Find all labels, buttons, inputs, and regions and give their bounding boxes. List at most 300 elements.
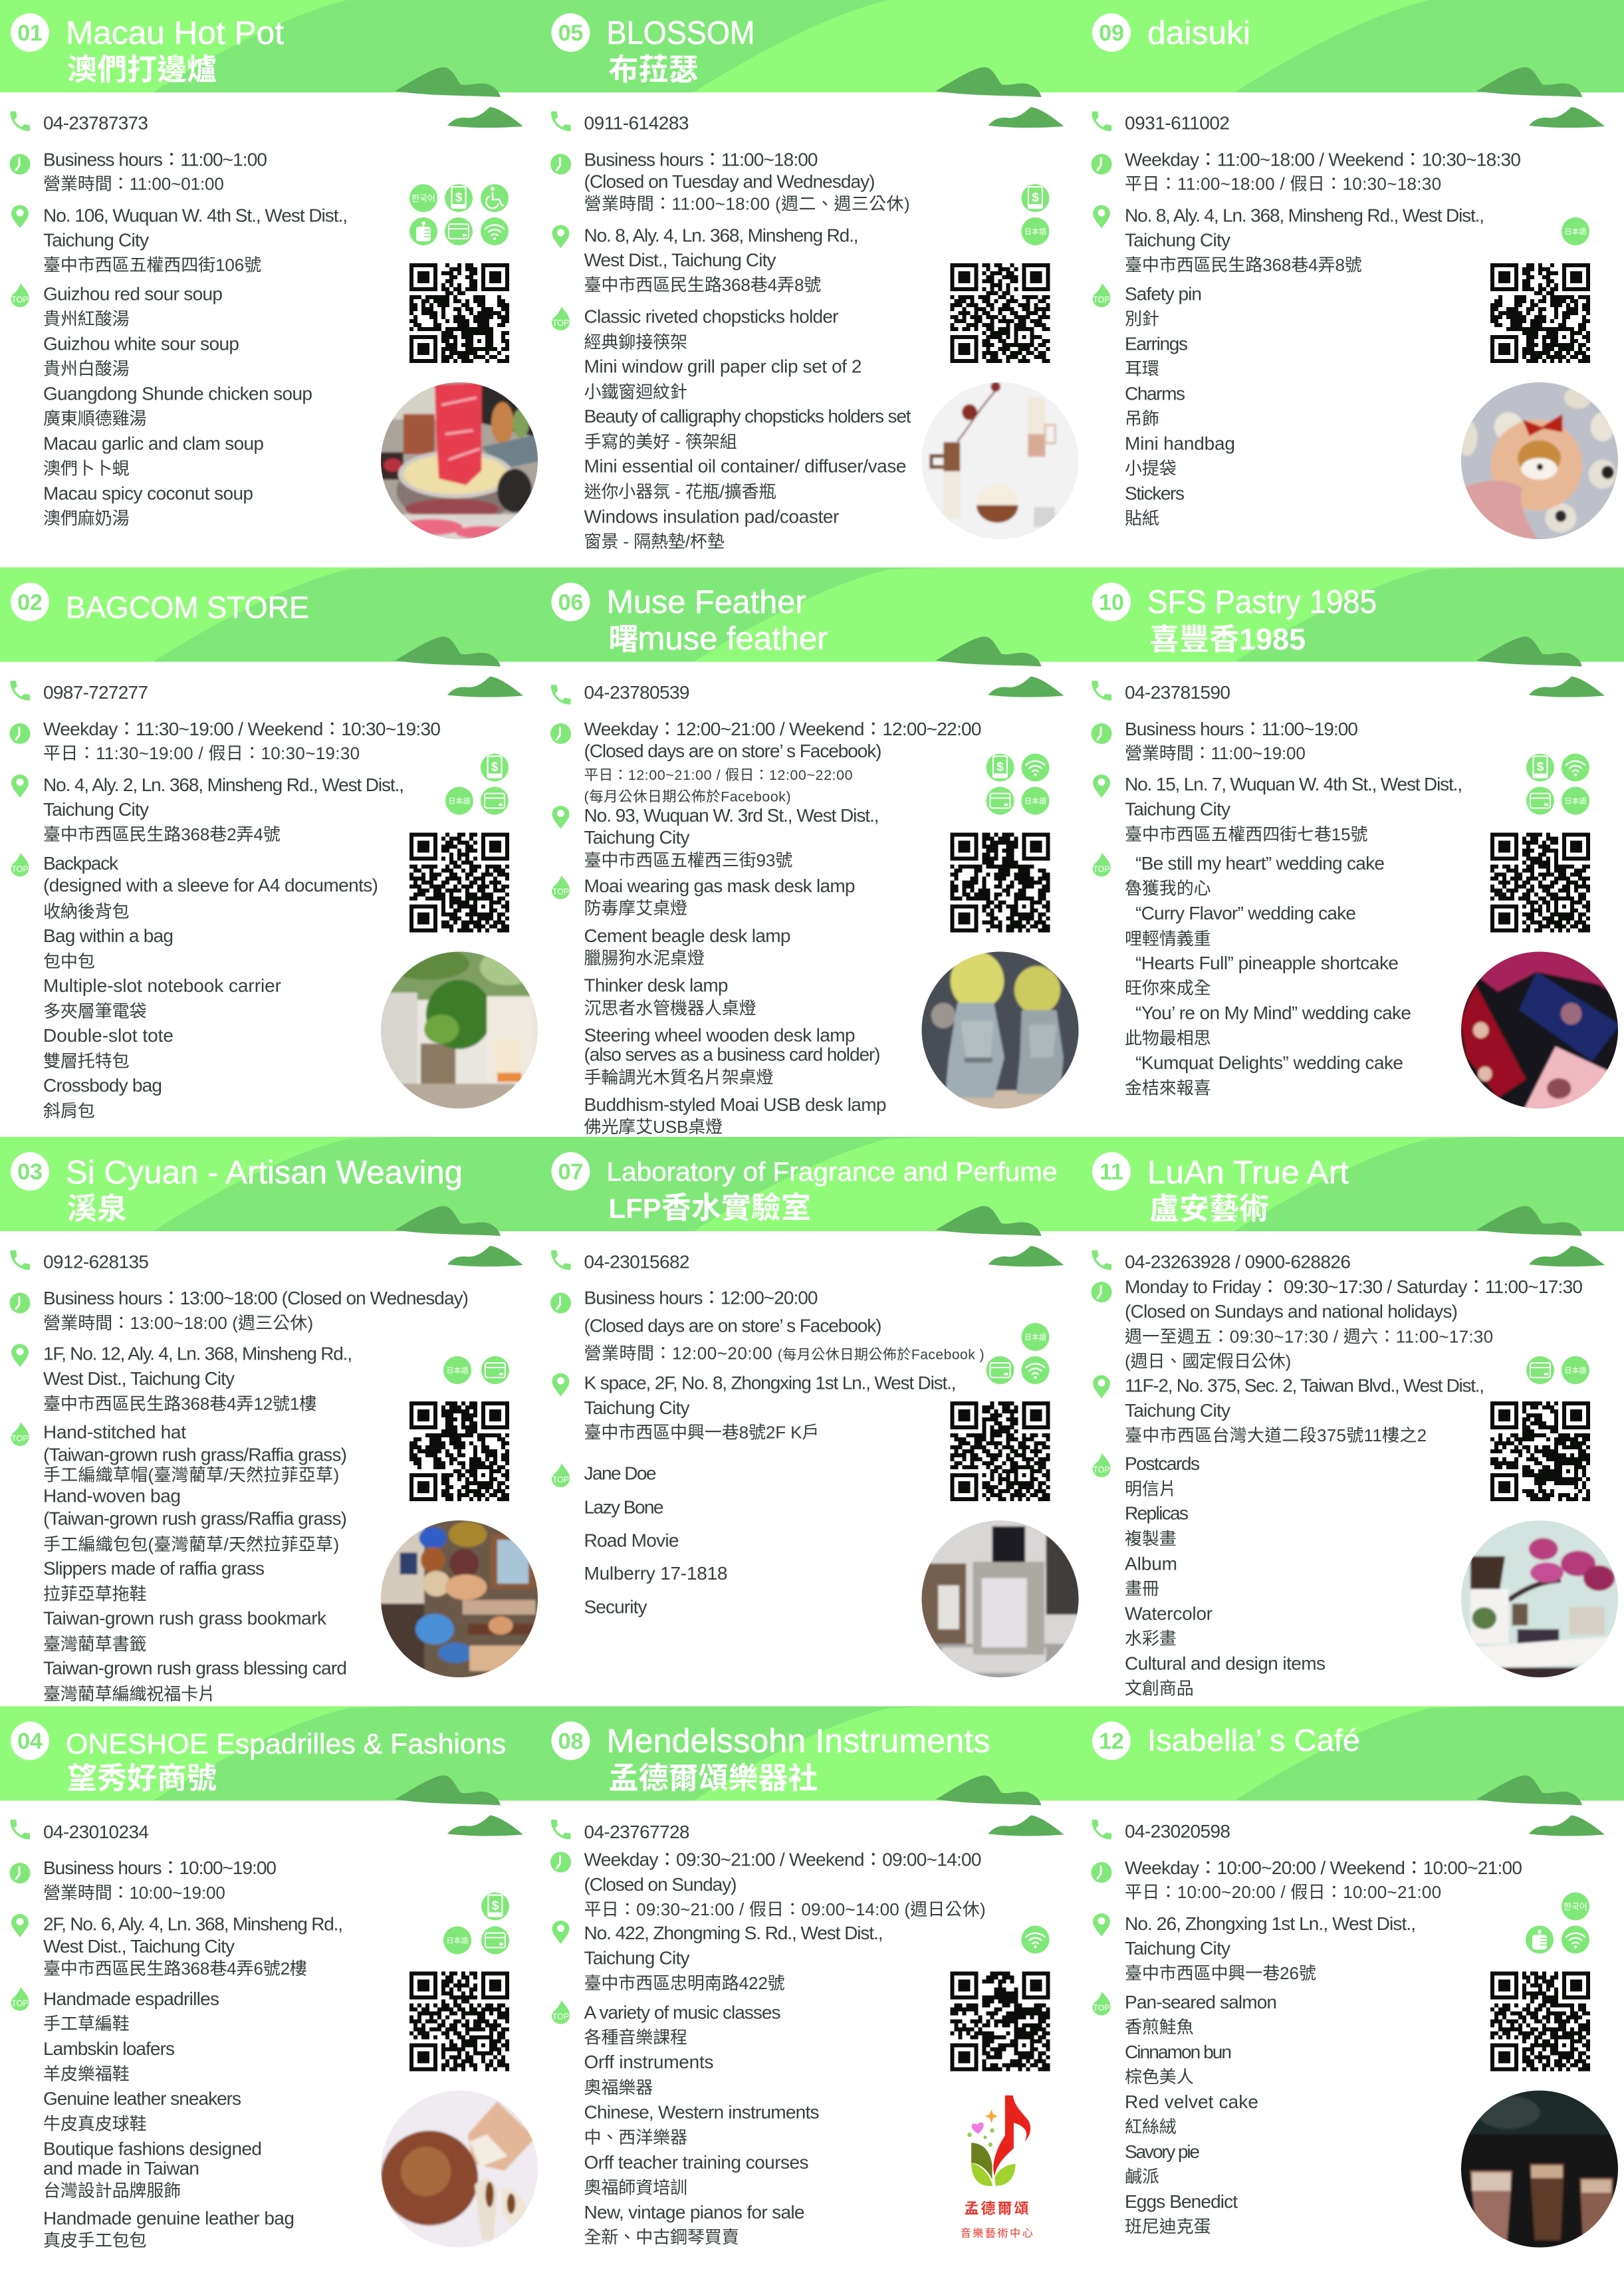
top items list: 畫冊 xyxy=(1125,1578,1159,1598)
header band xyxy=(1082,1706,1624,1800)
panel 10: SFS Pastry 1985 xyxy=(1082,568,1624,1116)
address: 臺中市西區台灣大道二段375號11樓之2 xyxy=(1125,1425,1427,1445)
phone icon xyxy=(1092,1820,1111,1840)
top items list: 防毒摩艾桌燈 xyxy=(584,898,687,918)
TOP drop icon xyxy=(552,1463,570,1487)
address: Taichung City xyxy=(584,1948,690,1968)
location pin icon xyxy=(11,1344,29,1367)
top items list: Road Movie xyxy=(584,1530,679,1550)
QR code xyxy=(951,263,1050,363)
business hours: Weekday：11:00~18:00 / Weekend：10:30~18:30 xyxy=(1125,149,1521,170)
top items list: 旺你來成全 xyxy=(1125,978,1211,998)
phone number: 04-23781590 xyxy=(1125,682,1230,703)
top items list: Handmade genuine leather bag xyxy=(43,2208,294,2228)
top items list: (designed with a sleeve for A4 documents) xyxy=(43,875,378,896)
number badge 07 xyxy=(552,1152,590,1191)
address: 臺中市西區五權西四街106號 xyxy=(43,255,261,275)
panel 11: LuAn True Art xyxy=(1082,1137,1624,1698)
top items list: 奧福師資培訓 xyxy=(584,2178,687,2198)
top items list: Crossbody bag xyxy=(43,1075,162,1096)
top items list: (also serves as a business card holder) xyxy=(584,1044,880,1065)
top items list: Jane Doe xyxy=(584,1463,657,1484)
top items list: Genuine leather sneakers xyxy=(43,2088,241,2109)
title: 喜豐香1985 xyxy=(1149,622,1306,656)
business hours xyxy=(43,149,267,194)
clock icon xyxy=(550,154,571,174)
QR code xyxy=(951,832,1050,932)
panel 01: Macau Hot Pot xyxy=(0,0,552,547)
address: No. 15, Ln. 7, Wuquan W. 4th St., West Dist., xyxy=(1125,774,1462,794)
top items list: Album xyxy=(1125,1553,1177,1574)
top items list: 明信片 xyxy=(1125,1479,1177,1498)
top items list: 真皮手工包包 xyxy=(43,2230,146,2250)
top items list: 手寫的美好 - 筷架組 xyxy=(584,432,737,452)
top items list: Pan-seared salmon xyxy=(1125,1992,1277,2012)
top items list: Beauty of calligraphy chopsticks holders set xyxy=(584,406,911,427)
service icons xyxy=(1526,754,1589,815)
TOP drop icon xyxy=(11,283,29,307)
service icons: 日本語 xyxy=(1565,227,1586,236)
clock icon xyxy=(9,723,31,744)
title: BLOSSOM xyxy=(606,15,755,51)
top items list: 紅絲絨 xyxy=(1125,2117,1177,2137)
header band xyxy=(541,568,1093,662)
top items list: 奧福樂器 xyxy=(584,2078,653,2097)
address: Taichung City xyxy=(1125,230,1230,250)
top items list: Classic riveted chopsticks holder xyxy=(584,306,839,327)
top items list: 澳們麻奶湯 xyxy=(43,508,130,528)
title xyxy=(66,15,284,86)
business hours xyxy=(1125,1857,1522,1902)
location pin icon xyxy=(11,775,29,798)
photo: gift boxes xyxy=(1461,952,1618,1109)
number badge 03 xyxy=(11,1152,49,1191)
top items list: 斜肩包 xyxy=(43,1101,95,1121)
business hours: Weekday：12:00~21:00 / Weekend：12:00~22:00 xyxy=(584,719,981,739)
header band xyxy=(1082,0,1624,92)
top items list: 魯獲我的心 xyxy=(1125,878,1211,898)
top items list: 佛光摩艾USB桌燈 xyxy=(584,1117,723,1137)
address xyxy=(1125,1375,1484,1445)
top items list: Mini essential oil container/ diffuser/vase xyxy=(584,456,907,476)
address: Taichung City xyxy=(1125,1400,1230,1421)
QR code xyxy=(951,1972,1050,2072)
clock icon xyxy=(550,723,571,744)
address xyxy=(1125,1913,1416,1983)
number badge 08 xyxy=(552,1722,590,1760)
top items list: Taiwan-grown rush grass bookmark xyxy=(43,1608,327,1629)
service icons xyxy=(1562,217,1589,245)
clock icon xyxy=(9,1292,31,1314)
clock icon xyxy=(9,1863,31,1883)
service icons: 日本語 xyxy=(1565,796,1586,806)
top items list: Bag within a bag xyxy=(43,925,174,946)
number badge 11 xyxy=(1092,1152,1131,1191)
top items list: Hand-woven bag xyxy=(43,1485,181,1506)
location pin icon xyxy=(552,225,569,249)
business hours: 平日：11:00~18:00 / 假日：10:30~18:30 xyxy=(1125,174,1441,194)
number badge 10 xyxy=(1092,582,1131,621)
QR code xyxy=(409,1972,509,2072)
top items list: Cinnamon bun xyxy=(1125,2042,1232,2062)
title: 澳們打邊爐 xyxy=(67,53,217,86)
location pin icon xyxy=(552,1374,569,1396)
QR code xyxy=(409,1401,509,1501)
TOP drop icon: TOP xyxy=(11,295,29,304)
business hours xyxy=(43,1857,277,1903)
top items list: Chinese, Western instruments xyxy=(584,2102,819,2122)
title xyxy=(606,15,755,86)
title: LuAn True Art xyxy=(1147,1155,1349,1191)
title xyxy=(66,1729,506,1795)
address: Taichung City xyxy=(1125,799,1230,819)
header band xyxy=(541,1137,1093,1231)
top items list: Macau spicy coconut soup xyxy=(43,483,253,504)
business hours: Business hours：12:00~20:00 xyxy=(584,1287,818,1308)
phone number: 04-23020598 xyxy=(1125,1821,1230,1842)
title: ONESHOE Espadrilles & Fashions xyxy=(66,1729,506,1760)
header band xyxy=(0,1137,552,1231)
business hours xyxy=(43,719,441,763)
top items list: (Taiwan-grown rush grass/Raffia grass) xyxy=(43,1508,347,1529)
top items list xyxy=(43,283,312,528)
business hours: Business hours：11:00~19:00 xyxy=(1125,719,1358,739)
address: 臺中市西區民生路368巷4弄12號1樓 xyxy=(43,1393,316,1413)
address xyxy=(1125,205,1484,275)
number badge 12 xyxy=(1092,1722,1131,1760)
business hours: Business hours：11:00~1:00 xyxy=(43,149,267,170)
address xyxy=(584,1923,883,1993)
top items list: Thinker desk lamp xyxy=(584,975,729,996)
top items list: 吊飾 xyxy=(1125,408,1159,428)
title: 溪泉 xyxy=(67,1191,127,1226)
address: 臺中市西區民生路368巷2弄4號 xyxy=(43,824,281,844)
clock icon xyxy=(9,154,31,174)
address: No. 26, Zhongxing 1st Ln., West Dist., xyxy=(1125,1913,1416,1934)
top items list: 台灣設計品牌服飾 xyxy=(43,2181,181,2201)
location pin icon xyxy=(11,1914,29,1937)
service icons: 日本語 xyxy=(448,796,471,806)
top items list: 水彩畫 xyxy=(1125,1629,1177,1649)
top items list: 多夾層筆電袋 xyxy=(43,1001,147,1021)
service icons: 日本語 xyxy=(447,1366,468,1375)
title: LFP香水實驗室 xyxy=(609,1191,811,1225)
logo: Mendelssohn music note: 音樂藝術中心 xyxy=(961,2227,1034,2239)
top items list: 沉思者水管機器人桌燈 xyxy=(584,999,756,1018)
phone icon xyxy=(551,1250,571,1270)
TOP drop icon: TOP xyxy=(552,2012,569,2021)
address: No. 422, Zhongming S. Rd., West Dist., xyxy=(584,1923,883,1943)
address xyxy=(1125,774,1462,844)
top items list xyxy=(43,853,378,1121)
top items list: Red velvet cake xyxy=(1125,2092,1258,2112)
small mountain xyxy=(447,677,523,697)
title xyxy=(606,1722,990,1795)
small mountain xyxy=(988,1815,1064,1836)
header band xyxy=(0,0,552,92)
service icons xyxy=(443,1892,509,1955)
business hours: (每月公休日期公佈於Facebook) xyxy=(584,789,791,805)
address: Taichung City xyxy=(43,230,149,250)
panel 07: Laboratory of Fragrance and Perfume xyxy=(541,1137,1093,1687)
location pin icon xyxy=(1093,205,1110,229)
photo: ceramics xyxy=(921,382,1078,539)
small mountain xyxy=(447,107,523,128)
clock icon xyxy=(1092,154,1111,174)
header band xyxy=(541,0,1093,92)
top items list: 拉菲亞草拖鞋 xyxy=(43,1584,146,1604)
TOP drop icon xyxy=(11,852,29,876)
title: daisuki xyxy=(1147,15,1250,51)
top items list: Security xyxy=(584,1597,647,1617)
business hours: Business hours：10:00~19:00 xyxy=(43,1857,277,1878)
panel 02: BAGCOM STORE xyxy=(0,568,552,1121)
address: West Dist., Taichung City xyxy=(43,1936,235,1957)
top items list: Lazy Bone xyxy=(584,1497,663,1517)
QR code xyxy=(409,263,509,363)
phone number: 04-23263928 / 0900-628826 xyxy=(1125,1251,1351,1272)
number badge 01: 01 xyxy=(17,21,43,46)
location pin icon xyxy=(1093,1375,1110,1399)
address: Taichung City xyxy=(584,1397,690,1418)
top items list: Charms xyxy=(1125,383,1185,404)
QR code xyxy=(951,1401,1050,1501)
address: K space, 2F, No. 8, Zhongxing 1st Ln., West Dist., xyxy=(584,1372,956,1393)
photo: cafe drinks xyxy=(1453,2084,1624,2258)
business hours: 營業時間：12:00~20:00 (每月公休日期公佈於Facebook ) xyxy=(584,1343,984,1363)
business hours xyxy=(584,1287,984,1363)
top items list: Eggs Benedict xyxy=(1125,2191,1238,2212)
top items list: 收納後背包 xyxy=(43,901,130,921)
phone icon xyxy=(551,1820,571,1840)
header mountain xyxy=(1476,637,1582,666)
header band xyxy=(541,1706,1093,1800)
header mountain xyxy=(1476,67,1582,97)
top items list: “Be still my heart” wedding cake xyxy=(1135,853,1385,874)
title: 望秀好商號 xyxy=(67,1761,217,1795)
number badge 05 xyxy=(552,13,590,52)
business hours xyxy=(584,719,981,805)
photo: moai lamps xyxy=(921,952,1078,1109)
top items list xyxy=(584,1463,727,1617)
top items list: 廣東順德雞湯 xyxy=(43,408,146,428)
panel 09: daisuki xyxy=(1082,0,1624,547)
top items list: 鹹派 xyxy=(1125,2167,1159,2187)
business hours xyxy=(43,1288,469,1333)
phone icon xyxy=(551,685,571,705)
top items list: Steering wheel wooden desk lamp xyxy=(584,1025,855,1045)
business hours: (Closed days are on store’ s Facebook) xyxy=(584,741,881,761)
service icons xyxy=(1526,1892,1589,1953)
location pin icon xyxy=(552,806,569,829)
small mountain xyxy=(1529,1815,1605,1836)
title: 布菈瑟 xyxy=(609,53,699,86)
top items list: Watercolor xyxy=(1125,1604,1213,1623)
clock icon xyxy=(1092,1862,1111,1883)
title: Muse Feather xyxy=(606,584,806,620)
service icon: wifi xyxy=(1021,1925,1049,1953)
business hours: Business hours：13:00~18:00 (Closed on Wednesday) xyxy=(43,1288,469,1308)
address: No. 93, Wuquan W. 3rd St., West Dist., xyxy=(584,805,879,826)
logo: Mendelssohn music note: 孟德爾頌 xyxy=(964,2201,1031,2216)
top items list: 貼紙 xyxy=(1125,508,1159,528)
address: Taichung City xyxy=(584,827,690,848)
TOP drop icon xyxy=(1093,1992,1110,2016)
service icons xyxy=(986,754,1049,815)
number badge 05: 05 xyxy=(558,21,583,46)
logo: Mendelssohn music note xyxy=(961,2095,1034,2239)
top items list: 臺灣藺草編織祝福卡片 xyxy=(43,1684,215,1704)
small mountain xyxy=(447,1815,523,1836)
number badge 09 xyxy=(1092,13,1131,52)
top items list: 牛皮真皮球鞋 xyxy=(43,2114,146,2134)
number badge 06: 06 xyxy=(558,590,583,616)
header mountain xyxy=(395,637,501,666)
address: No. 8, Aly. 4, Ln. 368, Minsheng Rd., West Dist., xyxy=(1125,205,1484,226)
address: 臺中市西區中興一巷8號2F K戶 xyxy=(584,1423,819,1443)
business hours xyxy=(1125,1276,1583,1371)
TOP drop icon: TOP xyxy=(1093,864,1110,874)
top items list: Mini window grill paper clip set of 2 xyxy=(584,356,862,376)
top items list: Handmade espadrilles xyxy=(43,1988,219,2009)
top items list: Hand-stitched hat xyxy=(43,1421,186,1443)
service icons xyxy=(443,1356,509,1384)
address: Taichung City xyxy=(43,799,149,820)
number badge 04: 04 xyxy=(17,1729,43,1754)
number badge 12: 12 xyxy=(1099,1729,1124,1754)
title xyxy=(606,1157,1057,1225)
TOP drop icon: TOP xyxy=(552,1475,569,1485)
top items list: 班尼迪克蛋 xyxy=(1125,2216,1211,2236)
title: Laboratory of Fragrance and Perfume xyxy=(606,1157,1057,1187)
top items list: Earrings xyxy=(1125,334,1188,354)
top items list: 此物最相思 xyxy=(1125,1028,1211,1048)
service icons: 日本語 xyxy=(1565,1366,1586,1375)
phone number: 04-23015682 xyxy=(584,1251,690,1272)
business hours: 平日：10:00~20:00 / 假日：10:00~21:00 xyxy=(1125,1882,1441,1902)
top items list: 別針 xyxy=(1125,308,1159,328)
header band xyxy=(1082,1137,1624,1231)
top items list: Double-slot tote xyxy=(43,1025,174,1046)
address: West Dist., Taichung City xyxy=(584,250,776,270)
clock icon xyxy=(1092,723,1111,744)
phone icon xyxy=(551,111,571,131)
top items list: 各種音樂課程 xyxy=(584,2028,687,2048)
top items list: Mulberry 17-1818 xyxy=(584,1563,727,1584)
clock icon xyxy=(1092,1282,1111,1302)
top items list: 臘腸狗水泥桌燈 xyxy=(584,948,705,968)
top items list: New, vintage pianos for sale xyxy=(584,2202,804,2222)
photo: hat and shoes xyxy=(381,2090,538,2247)
title xyxy=(1147,584,1377,656)
top items list: Guangdong Shunde chicken soup xyxy=(43,383,312,404)
top items list: Slippers made of raffia grass xyxy=(43,1558,265,1578)
address xyxy=(43,1343,352,1413)
phone number: 0931-611002 xyxy=(1125,113,1230,133)
top items list: 小鐵窗迴紋針 xyxy=(584,382,687,402)
clock icon xyxy=(550,1852,571,1872)
photo: shiba charm xyxy=(1461,382,1618,539)
service icons xyxy=(445,754,509,815)
title xyxy=(66,1155,463,1226)
TOP drop icon xyxy=(11,1986,29,2010)
QR code xyxy=(1490,263,1590,363)
number badge 02 xyxy=(11,582,49,621)
TOP drop icon: TOP xyxy=(11,1434,29,1443)
address: West Dist., Taichung City xyxy=(43,1368,235,1389)
top items list xyxy=(1125,1453,1326,1698)
TOP drop icon: TOP xyxy=(1093,295,1110,304)
top items list: Macau garlic and clam soup xyxy=(43,433,264,453)
location pin icon xyxy=(11,205,29,229)
number badge 08: 08 xyxy=(558,1729,583,1754)
business hours: 營業時間：11:00~18:00 (週二、週三公休) xyxy=(584,194,909,214)
small mountain xyxy=(1529,1246,1605,1266)
top items list: 全新、中古鋼琴買賣 xyxy=(584,2227,739,2247)
top items list: “Curry Flavor” wedding cake xyxy=(1135,903,1356,923)
top items list xyxy=(584,306,911,552)
phone number: 0911-614283 xyxy=(584,113,689,133)
top items list: 手輪調光木質名片架桌燈 xyxy=(584,1068,774,1088)
title: Macau Hot Pot xyxy=(66,15,284,51)
address: No. 8, Aly. 4, Ln. 368, Minsheng Rd., xyxy=(584,225,859,246)
number badge 03: 03 xyxy=(17,1159,43,1185)
title: SFS Pastry 1985 xyxy=(1147,584,1377,620)
QR code xyxy=(1490,1401,1590,1501)
top items list: Moai wearing gas mask desk lamp xyxy=(584,876,855,896)
TOP drop icon: TOP xyxy=(1093,2004,1110,2013)
business hours: Weekday：09:30~21:00 / Weekend：09:00~14:00 xyxy=(584,1850,981,1869)
top items list: Backpack xyxy=(43,853,119,874)
top items list: 複製畫 xyxy=(1125,1529,1177,1549)
top items list xyxy=(1125,1992,1277,2236)
business hours xyxy=(1125,149,1521,194)
phone number: 0912-628135 xyxy=(43,1251,149,1272)
title xyxy=(606,584,828,657)
title: 孟德爾頌樂器社 xyxy=(609,1761,818,1795)
top items list: 包中包 xyxy=(43,951,95,971)
top items list xyxy=(584,876,887,1137)
title xyxy=(1147,1155,1349,1226)
address xyxy=(43,775,404,844)
business hours: Monday to Friday： 09:30~17:30 / Saturday：11:00~17:30 xyxy=(1125,1276,1583,1297)
top items list: 金桔來報喜 xyxy=(1125,1078,1211,1098)
photo: orchid painting xyxy=(1461,1520,1618,1677)
top items list: 雙層托特包 xyxy=(43,1051,130,1071)
title: 曙muse feather xyxy=(609,621,828,657)
top items list xyxy=(43,1421,347,1704)
phone icon xyxy=(10,681,30,701)
photo: hot pot xyxy=(381,382,538,539)
panel 12: Isabella's Cafe xyxy=(1082,1706,1624,2258)
address: 臺中市西區民生路368巷4弄8號 xyxy=(584,275,821,295)
address: 臺中市西區中興一巷26號 xyxy=(1125,1963,1316,1983)
top items list: 手工編織包包(臺灣藺草/天然拉菲亞草) xyxy=(43,1534,339,1554)
top items list: 哩輕情義重 xyxy=(1125,929,1211,949)
number badge 02: 02 xyxy=(17,590,43,616)
header mountain xyxy=(395,1206,501,1236)
title: Si Cyuan - Artisan Weaving xyxy=(66,1155,463,1191)
number badge 06 xyxy=(552,582,590,621)
title: 盧安藝術 xyxy=(1149,1191,1269,1226)
TOP drop icon xyxy=(552,875,570,899)
service icons: 日本語 xyxy=(1024,796,1046,806)
phone icon xyxy=(1092,681,1111,701)
address xyxy=(43,1913,343,1978)
top items list: Taiwan-grown rush grass blessing card xyxy=(43,1658,347,1678)
address xyxy=(584,805,879,870)
TOP drop icon: TOP xyxy=(11,864,29,874)
